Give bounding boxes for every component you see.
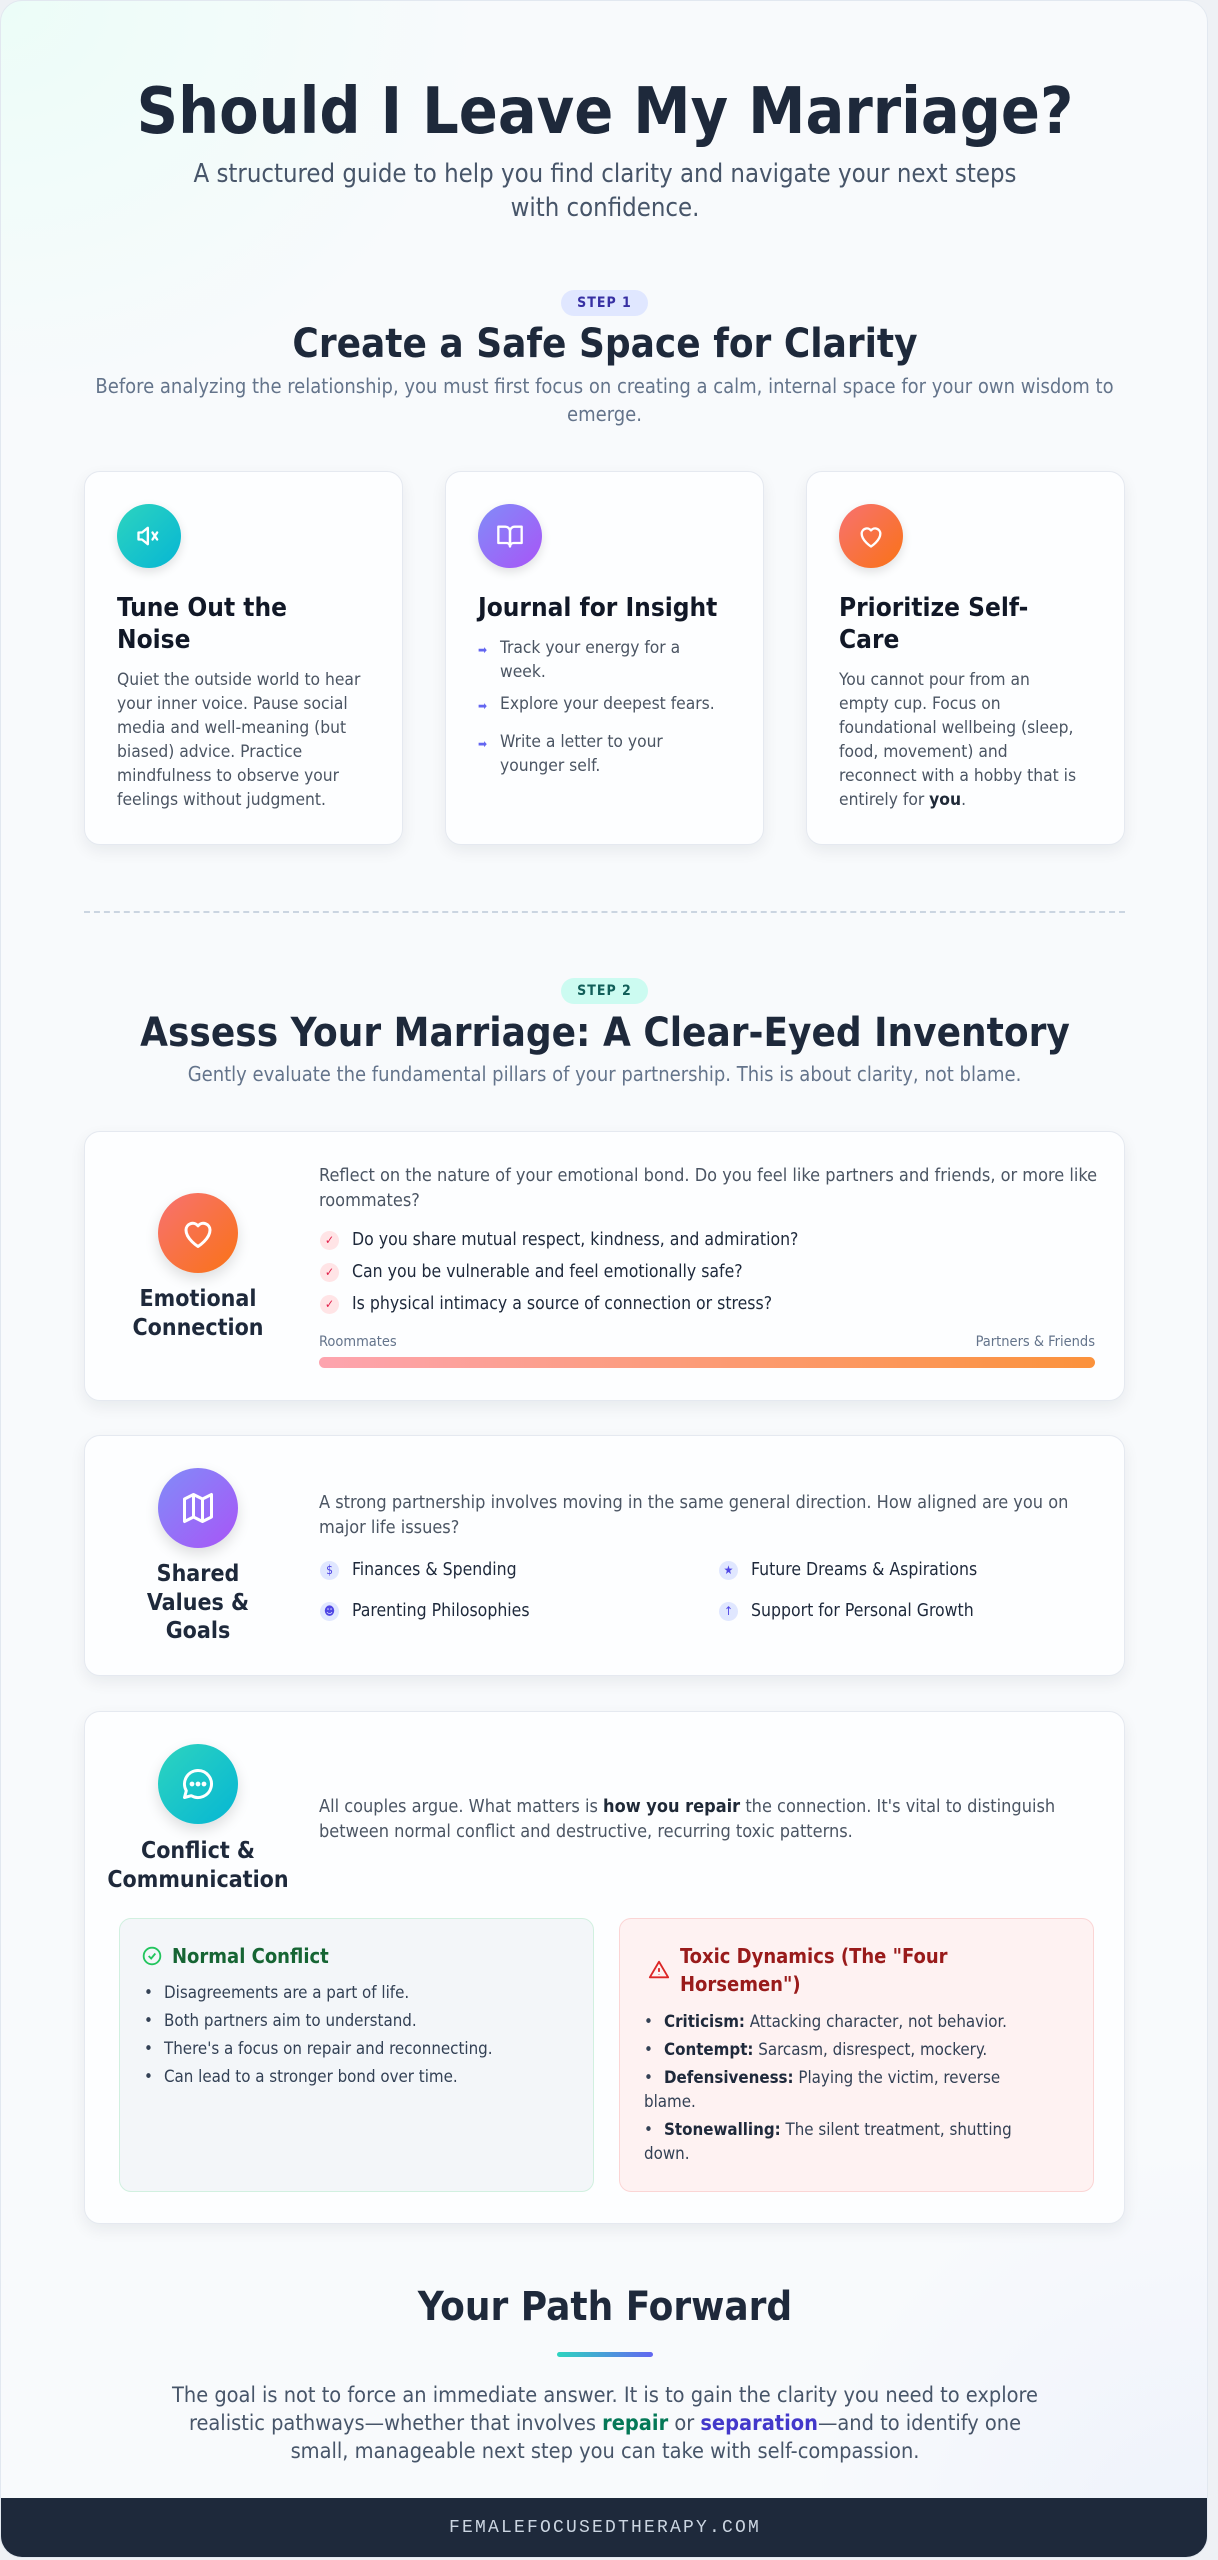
box: normal conflict: Can lead to a stronger bond over time. — [164, 2066, 458, 2086]
label: Conflict & Communication — [107, 1838, 289, 1892]
box: toxic dynamics: • — [644, 2011, 653, 2031]
closing text: small, manageable next step you can take with self-compassion. — [291, 2439, 919, 2464]
box: normal conflict: • — [144, 1982, 153, 2002]
closing text: The goal is not to force an immediate answer. It is to gain the clarity you need to explore — [172, 2383, 1038, 2408]
card: journal for insight: ➡ — [478, 643, 487, 657]
checklist: ✓ — [325, 1265, 334, 1279]
step 1 description: Before analyzing the relationship, you must first focus on creating a calm, internal space for your own wisdom to emerge. — [95, 374, 1114, 426]
value items: Finances & Spending — [352, 1560, 517, 1580]
box: normal conflict: • — [144, 2010, 153, 2030]
value items: Future Dreams & Aspirations — [751, 1560, 977, 1580]
label: Shared Values & Goals — [147, 1561, 249, 1644]
box: toxic dynamics: • — [644, 2119, 653, 2139]
footer — [1, 2498, 1209, 2559]
step 2 description: Gently evaluate the fundamental pillars of your partnership. This is about clarity, not blame. — [188, 1062, 1021, 1086]
card: journal for insight: ➡ — [478, 737, 487, 751]
icon: speaker — [117, 504, 181, 568]
icon: map — [158, 1468, 238, 1548]
panel: shared values — [84, 1435, 1125, 1676]
step 1 badge: STEP 1 — [577, 295, 632, 311]
icon: chat — [158, 1744, 238, 1824]
box: normal conflict: • — [144, 2038, 153, 2058]
closing text — [172, 2383, 1038, 2464]
step 2 badge: STEP 2 — [577, 983, 632, 999]
step 2 heading: Assess Your Marriage: A Clear-Eyed Inventory — [140, 1010, 1070, 1056]
checklist: Can you be vulnerable and feel emotionally safe? — [352, 1262, 743, 1282]
panel: emotional connection — [84, 1131, 1125, 1401]
footer: FEMALEFOCUSEDTHERAPY.COM — [449, 2518, 761, 2538]
subtitle: A structured guide to help you find clarity and navigate your next steps with confidence. — [193, 159, 1016, 223]
box: normal conflict — [119, 1918, 594, 2192]
card: journal for insight: Journal for Insight — [478, 593, 717, 623]
scale bar: Partners & Friends — [976, 1334, 1095, 1350]
scale bar: Roommates — [319, 1334, 397, 1350]
icon: heart — [158, 1193, 238, 1273]
card: journal for insight: Track your energy for a week. — [500, 638, 680, 682]
box: toxic dynamics: Contempt: Sarcasm, disrespect, mockery. — [664, 2039, 987, 2059]
label: Emotional Connection — [132, 1286, 264, 1340]
box: normal conflict: There's a focus on repair and reconnecting. — [164, 2038, 493, 2058]
checklist: ✓ — [325, 1297, 334, 1311]
checklist: Do you share mutual respect, kindness, and admiration? — [352, 1230, 798, 1250]
box: normal conflict: • — [144, 2066, 153, 2086]
panel: conflict & communication — [84, 1711, 1125, 2224]
value items: ★ — [724, 1563, 733, 1577]
text: A strong partnership involves moving in the same general direction. How aligned are you on major life issues? — [319, 1492, 1068, 1538]
value items: ☻ — [324, 1604, 335, 1618]
card: tune out the noise — [84, 471, 403, 845]
card: journal for insight — [445, 471, 764, 845]
icon: book — [478, 504, 542, 568]
closing text: realistic pathways—whether that involves repair or separation—and to identify one — [189, 2411, 1021, 2436]
box: toxic dynamics: Defensiveness: Playing the victim, reverse blame. — [644, 2067, 1000, 2111]
card: tune out the noise: Quiet the outside world to hear your inner voice. Pause social media and well-meaning (but biased) advice. Practice mindfulness to observe your feelings without judgment. — [117, 670, 360, 810]
box: toxic dynamics — [619, 1918, 1094, 2192]
card: prioritize self-care: You cannot pour from an empty cup. Focus on foundational wellbeing (sleep, food, movement) and reconnect with a hobby that is entirely for you. — [839, 670, 1076, 810]
text: All couples argue. What matters is how you repair the connection. It's vital to distinguish between normal conflict and destructive, recurring toxic patterns. — [319, 1796, 1055, 1842]
step 1 heading: Create a Safe Space for Clarity — [292, 321, 918, 367]
title: Should I Leave My Marriage? — [137, 75, 1073, 149]
value items: Support for Personal Growth — [751, 1601, 974, 1621]
icon: heart — [839, 504, 903, 568]
box: normal conflict: Disagreements are a part of life. — [164, 1982, 409, 2002]
box: normal conflict: Both partners aim to understand. — [164, 2010, 417, 2030]
card: journal for insight: Explore your deepest fears. — [500, 694, 715, 714]
step 2 badge — [561, 978, 648, 1004]
step 1 badge — [561, 290, 648, 316]
value items — [320, 1560, 977, 1621]
card: journal for insight: ➡ — [478, 699, 487, 713]
box: toxic dynamics: Stonewalling: The silent treatment, shutting down. — [644, 2119, 1012, 2163]
text: Reflect on the nature of your emotional bond. Do you feel like partners and friends, or more like roommates? — [319, 1165, 1097, 1211]
heading: your path forward: Your Path Forward — [418, 2284, 792, 2330]
checklist — [320, 1230, 798, 1314]
scale bar — [319, 1334, 1095, 1368]
card: prioritize self-care — [806, 471, 1125, 845]
accent bar — [557, 2352, 653, 2357]
checklist: Is physical intimacy a source of connection or stress? — [352, 1294, 772, 1314]
value items: ↑ — [724, 1604, 733, 1618]
value items: Parenting Philosophies — [352, 1601, 530, 1621]
value items: $ — [326, 1563, 333, 1577]
box: toxic dynamics: Criticism: Attacking character, not behavior. — [664, 2011, 1007, 2031]
card: journal for insight: Write a letter to your younger self. — [500, 732, 663, 776]
card: tune out the noise: Tune Out the Noise — [117, 593, 287, 655]
box: toxic dynamics: Toxic Dynamics (The "Four Horsemen") — [680, 1944, 948, 1996]
box: toxic dynamics: • — [644, 2067, 653, 2087]
checklist: ✓ — [325, 1233, 334, 1247]
box: toxic dynamics: • — [644, 2039, 653, 2059]
card: prioritize self-care: Prioritize Self-Care — [839, 593, 1028, 655]
box: normal conflict: Normal Conflict — [172, 1944, 329, 1968]
